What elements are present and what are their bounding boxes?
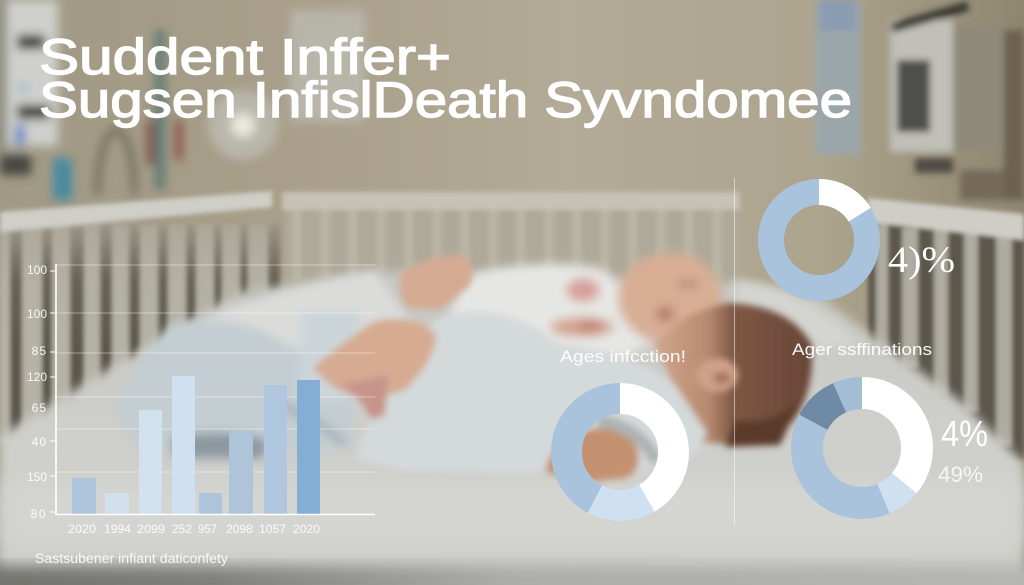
x axis labels: 1057 [259,524,286,536]
baby 2 [313,255,812,482]
x axis labels: 252 [172,524,192,536]
donut chart: bottom right [785,371,939,525]
y axis labels: 100 [27,307,47,321]
mattress [0,270,1024,585]
wall poster and monitor right [815,0,1024,200]
donut chart: top right [771,192,867,288]
wall equipment left [0,0,365,200]
x axis labels: 2020 [68,524,96,536]
y axis labels: 150 [27,470,47,484]
x axis labels: 2098 [226,524,253,536]
title [39,29,852,128]
gridlines [57,265,375,472]
percentage labels: bottom donut [938,413,988,487]
y axis labels: 80 [31,507,47,521]
donut label: right: Ager ssffinations [792,340,932,359]
x axis labels: 957 [198,524,217,536]
y axis labels: 65 [32,401,47,415]
x axis labels: 2099 [137,524,165,536]
y axis labels: 40 [32,435,47,449]
percentage label: top donut: 4)% [888,240,955,281]
y axis labels: 85 [32,344,47,358]
donut label: left: Ages infcction! [560,347,686,366]
title: Sugsen InfislDeath Syvndomee [39,72,852,128]
x axis labels [68,524,320,536]
wedge of sheet behind head [735,280,860,350]
y axis labels [27,263,47,521]
chart caption: Sastsubener infiant daticonfety [35,551,228,566]
x axis labels: 1994 [104,524,132,536]
donut chart: bottom left [547,379,693,525]
bar chart [27,263,375,536]
baby 1 [450,252,722,360]
crib back rails and slats [0,191,1024,460]
vertical divider [734,178,736,525]
percentage labels: bottom donut: 49% [938,462,983,487]
bars [72,376,320,514]
y axis labels: 100 [27,263,47,277]
percentage labels: bottom donut: 4% [941,413,988,454]
axes [50,264,375,515]
x axis labels: 2020 [293,524,320,536]
y axis labels: 120 [27,370,47,384]
title: Suddent Inffer+ [39,29,451,85]
blanket and pillow [112,270,415,458]
